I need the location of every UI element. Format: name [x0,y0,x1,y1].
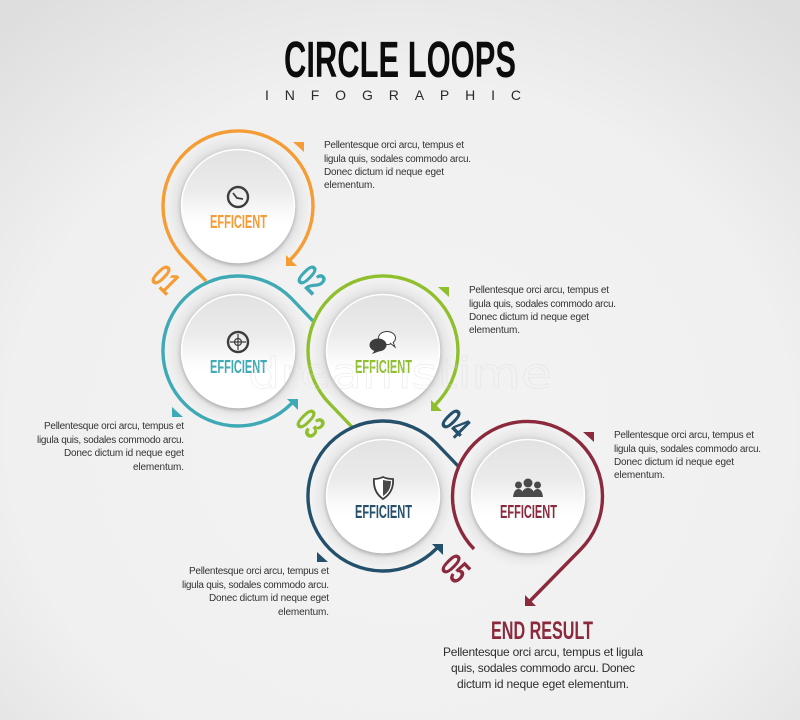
disc 1 [182,150,294,262]
text block 5: elementum. [614,470,665,481]
text block 2 [469,285,616,336]
text block 4: Pellentesque orci arcu, tempus et [189,566,329,577]
text block 3: ligula quis, sodales commodo arcu. [37,435,184,446]
text block 1 [324,140,471,191]
label: efficient: EFFICIENT [355,501,412,522]
text block 1: Pellentesque orci arcu, tempus et [324,140,464,151]
text block 3 [37,421,184,473]
loop 3: green [308,276,458,427]
number 05: 05 [434,546,478,590]
text block 4: elementum. [278,607,329,618]
title: CIRCLE LOOPS [284,31,516,88]
corner markers [172,142,594,562]
text block 4: Donec dictum id neque eget [209,593,329,604]
text block 5 [614,430,761,481]
number 04: 04 [434,401,478,446]
end result text: quis, sodales commodo arcu. Donec [451,661,635,675]
disc halos [166,134,600,568]
label: efficient: EFFICIENT [210,211,267,232]
text block 3: Pellentesque orci arcu, tempus et [44,421,184,432]
watermark: dreamstime [248,349,552,398]
end result text: Pellentesque orci arcu, tempus et ligula [443,645,643,659]
label: efficient: EFFICIENT [355,356,412,377]
icon: compass [228,332,248,352]
text block 1: elementum. [324,180,375,191]
icon: clock [228,187,248,207]
text block 3: Donec dictum id neque eget [64,448,184,459]
loop 1: orange [163,131,313,281]
subtitle: INFOGRAPHIC [265,87,521,103]
text block 5: ligula quis, sodales commodo arcu. [614,444,761,455]
disc 5 [472,440,584,552]
label: efficient: EFFICIENT [500,501,557,522]
disc 4 [326,440,440,552]
text block 4 [182,566,329,618]
end result text: dictum id neque eget elementum. [457,677,629,691]
disc 2 [182,294,294,408]
text block 1: ligula quis, sodales commodo arcu. [324,154,471,165]
text block 2: ligula quis, sodales commodo arcu. [469,299,616,310]
loop 2: teal [163,276,313,426]
label: efficient: EFFICIENT [210,356,267,377]
number 01: 01 [144,257,188,301]
number 03: 03 [289,401,333,445]
loop 4: navy [308,421,458,571]
text block 3: elementum. [133,462,184,473]
loop 5: maroon [453,421,602,606]
icon: chat bubbles [370,332,396,354]
text block 2: Donec dictum id neque eget [469,312,589,323]
text block 4: ligula quis, sodales commodo arcu. [182,580,329,591]
text block 5: Donec dictum id neque eget [614,457,734,468]
icon: shield [374,477,393,499]
text block 5: Pellentesque orci arcu, tempus et [614,430,754,441]
text block 2: elementum. [469,325,520,336]
text block 2: Pellentesque orci arcu, tempus et [469,285,609,296]
disc 3 [326,294,440,408]
number 02: 02 [290,257,334,301]
text block 1: Donec dictum id neque eget [324,167,444,178]
icon: people [513,478,543,497]
end result text [443,645,643,691]
end result heading: END RESULT [491,617,593,645]
